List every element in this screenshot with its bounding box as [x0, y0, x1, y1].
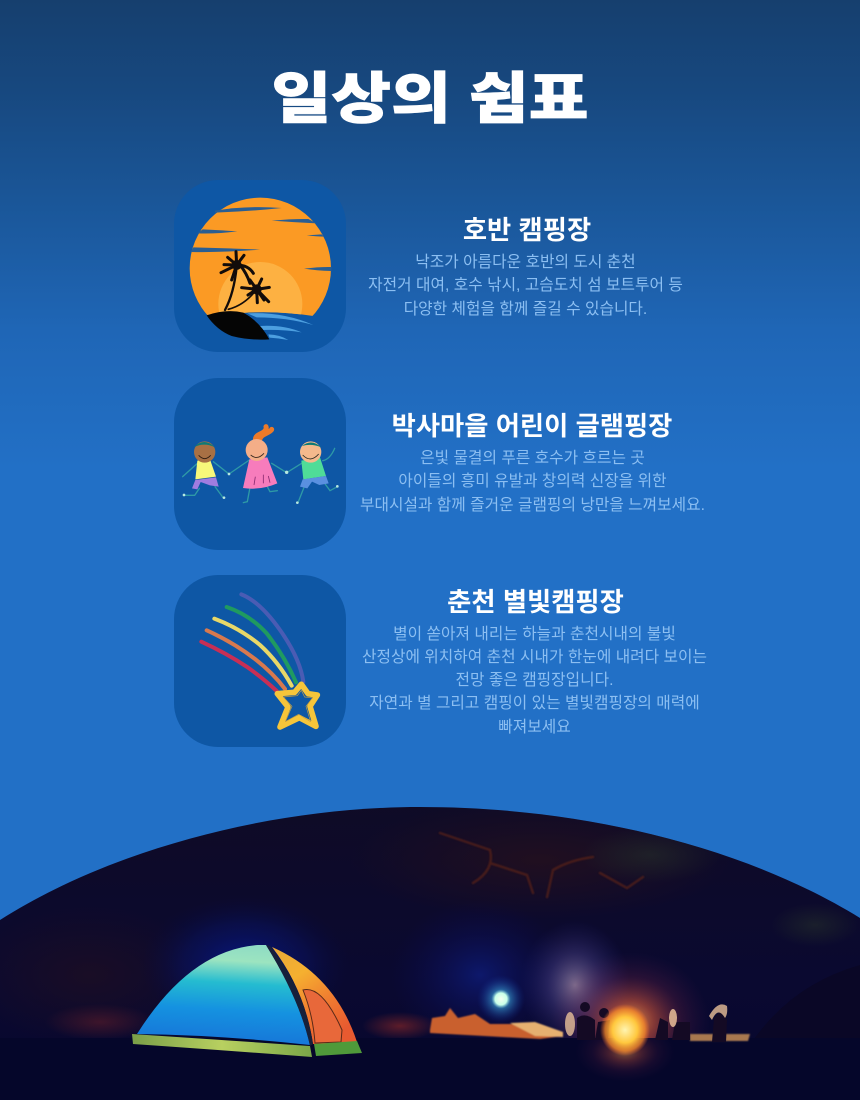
- limbs: [183, 448, 337, 503]
- text block: kids glamping: 아이들의 흥미 유발과 창의력 신장을 위한: [398, 473, 667, 490]
- heading: starlight camping: 춘천 별빛캠핑장: [447, 587, 624, 617]
- palm trees: [221, 252, 269, 310]
- people: [577, 1002, 727, 1042]
- ground glow below fire: [585, 1038, 665, 1076]
- child middle: [243, 427, 277, 489]
- star: [277, 684, 317, 727]
- lit grass: [430, 1008, 750, 1041]
- icon: sunset island: [174, 180, 346, 352]
- ground: [84, 1038, 701, 1086]
- tree canopy: [28, 814, 842, 1043]
- waves: [247, 313, 313, 340]
- text block: lakeside camping: 자전거 대여, 호수 낚시, 고슴도치 섬 보트투어 등: [368, 277, 683, 294]
- text block: starlight camping: 빠져보세요: [498, 719, 571, 736]
- navy glow behind lamp: [412, 917, 544, 1024]
- text block: starlight camping: 자연과 별 그리고 캠핑이 있는 별빛캠핑장의 매력에: [369, 695, 700, 712]
- dark far tent: [756, 965, 860, 1038]
- child right: [300, 441, 329, 488]
- tree branches: [440, 833, 643, 897]
- sun: [190, 198, 331, 316]
- icon: rainbow shooting star: [174, 575, 346, 747]
- heading: kids glamping: 박사마을 어린이 글램핑장: [392, 411, 672, 441]
- tent halo: [160, 908, 329, 1001]
- heading: lakeside camping: 호반 캠핑장: [463, 215, 591, 245]
- text block: lakeside camping: 낙조가 아름다운 호반의 도시 춘천: [415, 254, 636, 271]
- icon: three children holding hands: [174, 378, 346, 550]
- text block: kids glamping: 은빛 물결의 푸른 호수가 흐르는 곳: [420, 450, 645, 467]
- text block: starlight camping: 산정상에 위치하여 춘천 시내가 한눈에 내려다 보이는: [362, 649, 707, 666]
- island: [207, 311, 269, 340]
- fire: [600, 1004, 650, 1056]
- red brush around tent: [54, 1008, 145, 1037]
- text block: kids glamping: 부대시설과 함께 즐거운 글램핑의 낭만을 느껴보세요.: [360, 497, 705, 514]
- text block: starlight camping: 별이 쏟아져 내리는 하늘과 춘천시내의 불빛: [393, 626, 676, 642]
- text block: starlight camping: 전망 좋은 캠핑장입니다.: [455, 672, 614, 689]
- title: 일상의 쉼표: [271, 67, 589, 130]
- child left: [192, 441, 219, 489]
- text block: kids glamping: [360, 450, 705, 514]
- clouds: [191, 207, 332, 271]
- text block: lakeside camping: 다양한 체험을 함께 즐길 수 있습니다.: [404, 301, 647, 318]
- text block: lakeside camping: [368, 254, 683, 318]
- tent body: [132, 945, 362, 1057]
- hands and feet: [183, 471, 339, 504]
- text block: starlight camping: [362, 626, 707, 736]
- light beam and glows: [529, 928, 620, 1038]
- photo: night campsite: [0, 800, 860, 1100]
